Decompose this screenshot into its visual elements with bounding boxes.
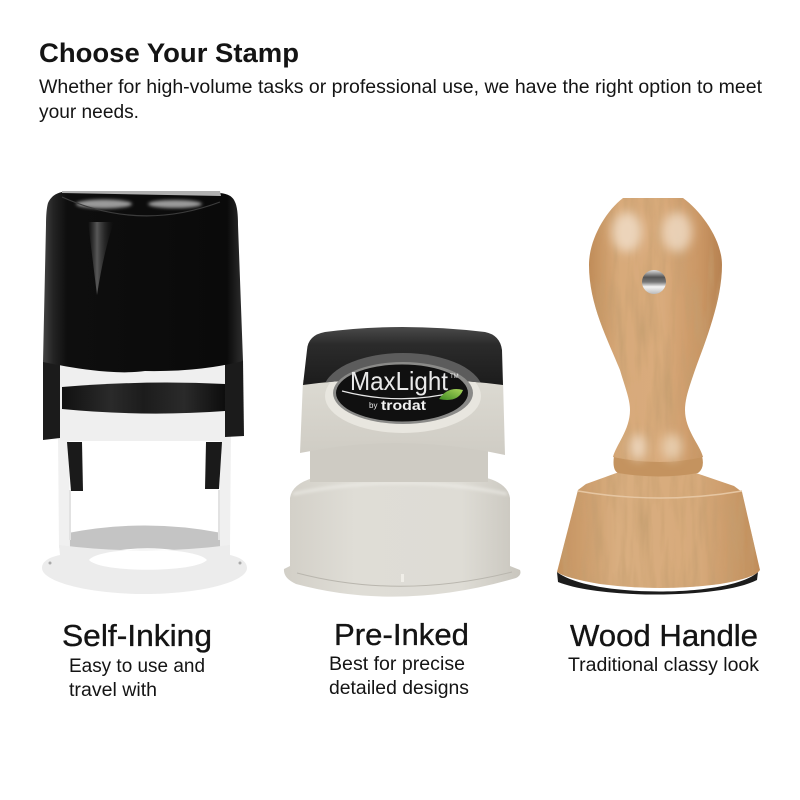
beige body <box>300 380 505 455</box>
label: Wood Handle: Wood Handle <box>570 618 758 653</box>
description: pre-inked: detailed designs <box>329 678 469 699</box>
panel: wood handle stamp <box>557 198 760 676</box>
black side flaps <box>43 360 60 440</box>
top gloss highlights <box>62 197 220 295</box>
icon: pre-inked stamp product <box>284 327 520 597</box>
wood base <box>557 471 760 588</box>
logo: MaxLight by trodat: MaxLight <box>350 366 449 396</box>
description: self-inking <box>69 656 205 701</box>
collar <box>614 456 703 476</box>
logo: MaxLight by trodat: trodat <box>381 397 426 413</box>
white collar <box>60 366 227 441</box>
black top <box>303 327 503 385</box>
icon: wood handle stamp product <box>557 198 760 595</box>
black cap <box>43 192 243 372</box>
intro text: Whether for high-volume tasks or professional use, we have the right option to meet <box>39 77 763 98</box>
metal ball <box>642 270 666 294</box>
panel: pre-inked stamp <box>284 327 520 699</box>
frame legs <box>58 436 231 548</box>
description: pre-inked <box>329 654 469 699</box>
leaf <box>439 389 463 400</box>
description: wood handle: Traditional classy look <box>568 655 759 676</box>
small black slides <box>67 442 83 491</box>
grey logo surround <box>326 353 480 382</box>
light ring around logo <box>325 359 481 433</box>
label: Self-Inking: Self-Inking <box>62 618 212 653</box>
black dial band <box>62 383 225 414</box>
icon: self-inking stamp product <box>42 191 247 594</box>
intro text: your needs. <box>39 102 139 123</box>
intro text <box>39 77 763 123</box>
neck <box>310 440 488 482</box>
label: Pre-Inked: Pre-Inked <box>334 617 469 652</box>
logo: MaxLight by trodat <box>333 362 473 424</box>
title: Choose Your Stamp <box>39 38 299 68</box>
wood handle <box>589 198 722 462</box>
description: self-inking: travel with <box>69 680 157 701</box>
logo: MaxLight by trodat: by <box>369 401 377 410</box>
header <box>39 38 763 123</box>
highlights <box>612 212 692 460</box>
description: pre-inked: Best for precise <box>329 654 465 675</box>
description: self-inking: Easy to use and <box>69 656 205 677</box>
round base <box>284 472 520 597</box>
panel: self-inking stamp <box>42 191 247 701</box>
top plate <box>62 191 221 196</box>
base ring <box>42 545 247 594</box>
inner grey base wall <box>68 526 222 557</box>
rubber bottom <box>557 572 758 595</box>
logo: MaxLight by trodat: TM <box>450 374 459 380</box>
